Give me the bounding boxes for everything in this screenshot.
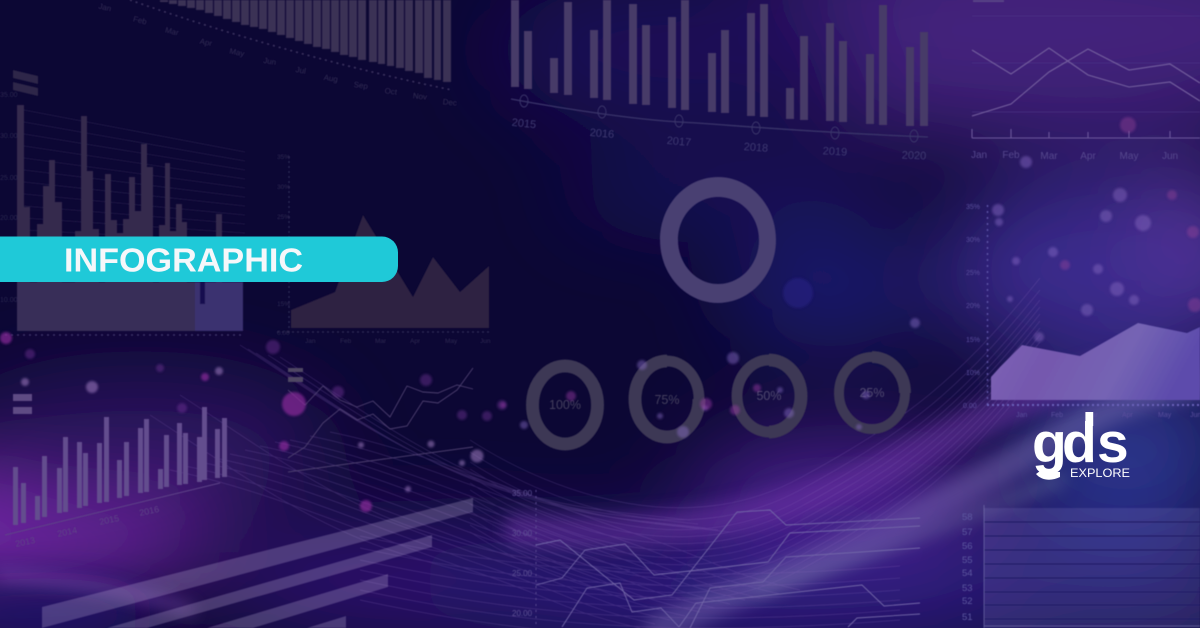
y axis [535,490,537,628]
axis labels: 35% [966,204,980,211]
series a [536,526,920,585]
y axis [986,205,988,405]
series e [848,614,920,627]
year labels: 2015 [98,513,120,527]
y labels: 25.00 [512,569,533,578]
band separators [984,522,1200,619]
month labels: Jan [98,2,112,13]
chart: monthly line chart [971,0,1200,162]
gauge 25%: 25% [859,386,885,400]
year labels: 2017 [666,135,692,149]
year labels: 2014 [56,525,78,539]
area [291,215,489,328]
gauge 100%: 100% [549,398,581,412]
month labels [98,2,457,108]
chart: yearly paired bars [511,0,928,162]
logo wordmark: gds [1032,411,1129,475]
logo d stem extension [1085,412,1093,426]
axis labels: 20% [966,303,980,310]
axis labels [963,204,1200,419]
chart: small line chart centre left [288,368,473,472]
x axis [987,404,1200,406]
bars [511,0,928,126]
month labels: Jun [263,56,277,67]
chart: left bar chart [0,70,245,335]
band [0,236,398,282]
month labels: Sep [353,80,369,91]
chart: diagonal bars bottom left [42,498,473,628]
legend mark [973,0,1004,2]
axis labels: May [445,338,458,345]
chart: curved monthly bars top left [98,0,457,108]
row labels: 55 [962,555,973,566]
axis labels: 25% [277,214,290,221]
axis labels: May [1158,412,1172,419]
axis [5,334,245,336]
axis labels [277,154,491,345]
y labels: 20.00 [512,609,533,618]
y labels [512,489,533,618]
axis labels: 10% [966,370,980,377]
year labels: 2013 [14,535,36,549]
background: light wave ribbons [0,370,1200,628]
axis [984,505,1200,628]
series 2 [288,368,473,458]
monthly bars [160,0,451,82]
month labels: Jul [295,65,307,76]
series c [562,583,679,627]
month labels: Aug [323,73,338,84]
month labels: Nov [412,91,427,102]
axis labels: 30% [966,237,980,244]
baseline [288,447,473,472]
gauge 25% [839,357,905,429]
axis labels: Jan [305,338,316,345]
month labels: May [229,47,245,58]
network: flowing lines [150,278,1040,628]
bars [13,407,227,525]
chart: multi line chart bottom centre [512,489,920,628]
heading: INFOGRAPHIC [64,242,303,280]
year labels: 2016 [138,504,160,518]
lower bar block [17,282,243,331]
row labels: 58 [962,512,973,523]
month labels [971,150,1178,162]
value labels: 30.00 [0,133,18,140]
year labels: 2018 [743,141,769,155]
gauge 75%: 75% [654,393,680,407]
month labels: Mar [1040,151,1058,162]
row labels: 51 [962,612,973,623]
chart: right area chart with dotted axes [963,204,1200,419]
axis dots [130,0,452,90]
month labels: Feb [132,14,148,27]
gauge 75% [635,361,699,437]
series 2 [972,49,1200,116]
grid lines [24,110,245,242]
axis labels: 0.00 [963,403,977,410]
value labels: 10.00 [0,297,18,304]
axis labels: 0.00 [277,330,290,337]
axis labels: 30% [277,184,290,191]
axis labels: Jan [1016,412,1027,419]
bars [17,105,222,283]
row labels: 53 [962,583,973,594]
year labels [14,504,160,549]
series b [536,510,920,600]
legend marks [13,70,38,96]
year labels: 2019 [822,145,847,159]
month labels: Jun [1162,151,1178,162]
axis labels: Feb [1051,412,1063,419]
chart: horizontal bands bottom right [962,505,1200,628]
value labels [0,92,18,304]
gauge 100% [532,366,598,444]
row labels: 57 [962,527,973,538]
year labels: 2016 [589,127,615,141]
axes [277,156,490,333]
band fill [984,508,1200,628]
timeline markers [520,95,918,142]
row labels [962,512,973,623]
year labels [511,117,926,162]
timeline axis [511,99,928,137]
legend marks [288,368,303,382]
axis labels: Mar [375,338,387,345]
chart: progress gauges [532,357,905,444]
series 1 [288,385,473,417]
chart: main donut [660,177,776,303]
month labels: May [1120,151,1138,162]
y labels: 35.00 [512,489,533,498]
value labels: 20.00 [0,215,18,222]
logo: gds explore [1032,411,1130,480]
axis labels: Jun [480,338,491,345]
month labels: Jan [971,150,987,161]
series 1 [972,48,1200,101]
baseline [972,129,1200,138]
axis labels: Apr [1122,412,1134,419]
chart: small bar chart bottom left [5,394,227,549]
axis [5,483,220,535]
row labels: 52 [962,596,973,607]
axis labels: Mar [1086,412,1099,419]
axis labels: 15% [966,337,980,344]
axis labels: 35% [277,154,290,161]
series d [679,585,920,627]
value labels: 25.00 [0,175,18,182]
month labels: Mar [164,25,180,38]
row labels: 54 [962,568,973,579]
axis labels: 25% [966,270,980,277]
year labels: 2020 [902,150,926,162]
area [991,323,1200,400]
row labels: 56 [962,541,973,552]
month labels: Feb [1002,150,1020,161]
gauge 50% [737,360,801,432]
axis labels: 15% [277,301,290,308]
chart: area chart [277,154,491,345]
logo subtitle: EXPLORE [1070,468,1130,480]
month labels: Apr [199,37,213,48]
month labels: Apr [1080,151,1096,162]
axis labels: Apr [410,338,421,345]
value labels: 35.00 [0,92,18,99]
grid lines [972,16,1200,112]
y labels: 30.00 [512,529,533,538]
gauge 50%: 50% [756,389,782,403]
legend marks [13,394,32,414]
logo g tail extension [1036,471,1060,480]
bokeh particles [0,117,1200,512]
year labels: 2015 [511,117,537,131]
month labels: Dec [442,97,457,108]
axis labels: Feb [340,338,352,345]
month labels: Oct [384,86,398,97]
label band: INFOGRAPHIC [0,236,398,282]
